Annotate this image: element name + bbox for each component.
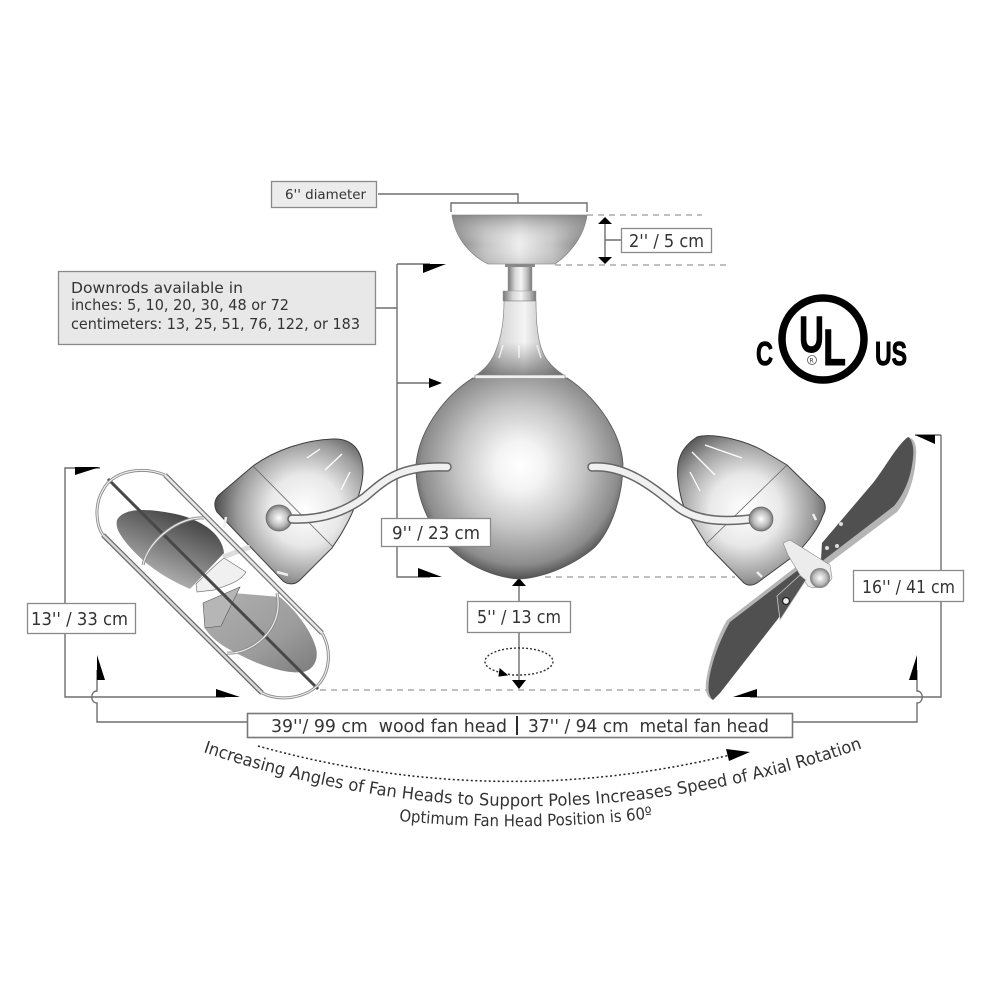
label: 16 inch / 41 cm	[854, 570, 964, 602]
icon: cUL US certification mark	[756, 298, 907, 380]
icon: cUL US certification mark: L	[823, 319, 846, 376]
right fan head	[592, 436, 916, 700]
right hub	[783, 540, 832, 588]
left hub	[196, 547, 250, 592]
left support arm	[292, 467, 447, 519]
optimum position caption: Optimum Fan Head Position is 60º	[400, 806, 651, 827]
label: 6 inch diameter: 6'' diameter	[285, 187, 366, 203]
right lower blade	[706, 566, 807, 700]
label: 16 inch / 41 cm: 16'' / 41 cm	[862, 577, 955, 598]
label: 9 inch / 23 cm: 9'' / 23 cm	[392, 523, 480, 544]
icon: cUL US certification mark: US	[875, 335, 907, 372]
left motor head	[215, 439, 363, 584]
label: 13 inch / 33 cm	[28, 604, 136, 634]
left blades	[117, 510, 317, 672]
right blade mount	[777, 522, 843, 620]
left mount plate	[203, 587, 240, 628]
right upper blade	[820, 437, 916, 570]
right motor head	[678, 436, 825, 585]
dashed rotation ellipse	[485, 648, 553, 676]
right ball joint	[749, 507, 773, 531]
icon: cUL US certification mark: R	[810, 358, 814, 364]
neck	[475, 301, 565, 376]
left fan head	[97, 439, 363, 698]
motor sphere	[416, 378, 623, 579]
label: 5 inch / 13 cm: 5'' / 13 cm	[477, 607, 561, 628]
label: downrods available: centimeters: 13, 25, 51, 76, 122, or 183	[71, 315, 360, 333]
icon: cUL US certification mark: U	[799, 306, 824, 363]
canopy	[452, 215, 587, 264]
dotted rotation arrow	[258, 746, 750, 781]
label: 6 inch diameter	[272, 182, 376, 208]
right support arm	[592, 467, 750, 521]
label: downrods available: inches: 5, 10, 20, 30, 48 or 72	[71, 296, 289, 314]
label: 13 inch / 33 cm: 13'' / 33 cm	[31, 609, 128, 630]
label: overall widths: 39''/ 99 cm wood fan head	[271, 717, 507, 737]
label: 9 inch / 23 cm	[382, 518, 490, 546]
stem	[503, 264, 536, 301]
label: overall widths: 37'' / 94 cm metal fan head	[528, 717, 769, 737]
dimension lines and arrows	[65, 194, 941, 722]
label: downrods available: Downrods available in	[71, 279, 243, 297]
label: downrods available	[58, 272, 376, 344]
curved caption: Increasing Angles of Fan Heads to Support Poles Increases Speed of Axial Rotation	[204, 740, 861, 810]
fan: canopy, stem and motor sphere	[416, 215, 623, 579]
label: 2 inch / 5 cm: 2'' / 5 cm	[629, 231, 704, 252]
left cage	[97, 470, 328, 698]
left ball joint	[266, 505, 292, 531]
icon: cUL US certification mark: C	[756, 335, 773, 372]
label: 5 inch / 13 cm	[468, 602, 570, 632]
label: overall widths	[248, 714, 792, 738]
flange	[475, 375, 565, 378]
